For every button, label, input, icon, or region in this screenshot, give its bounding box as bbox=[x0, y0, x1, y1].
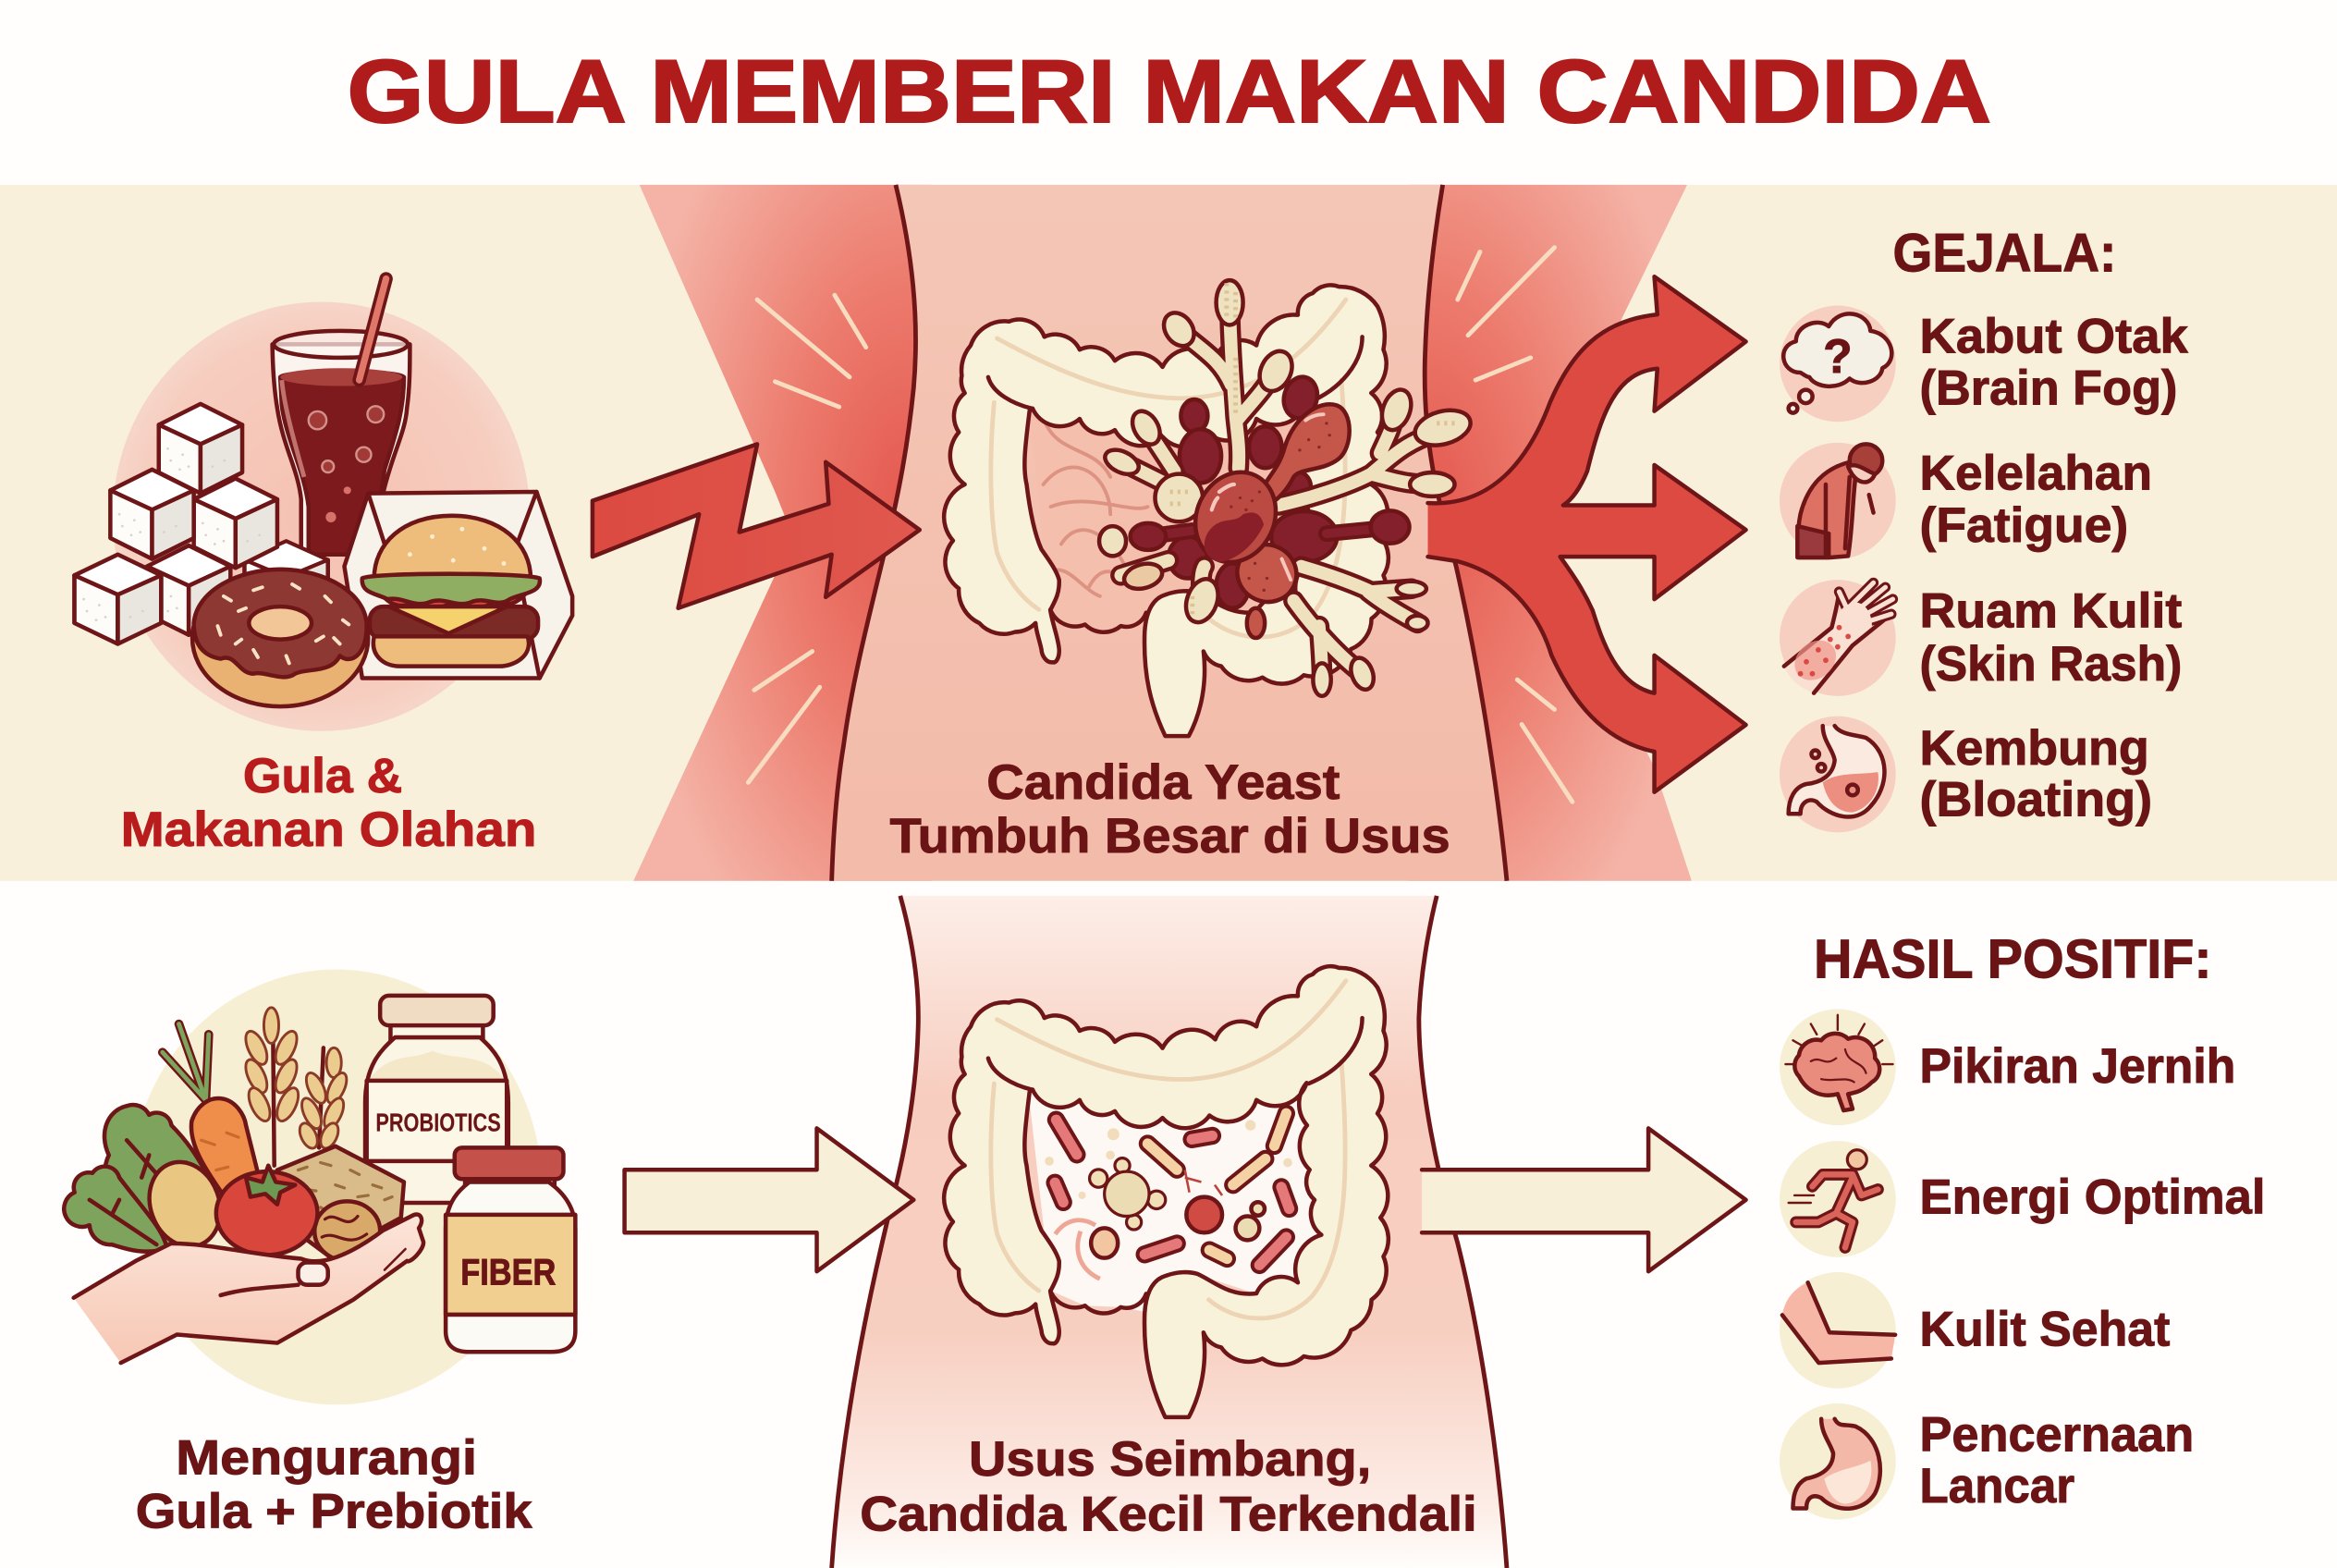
panel: healthy abdomen body bbox=[832, 896, 1507, 1568]
symptom: skin rash: Ruam Kulit bbox=[1920, 584, 2183, 639]
heading: hasil positif: HASIL POSITIF: bbox=[1814, 928, 2212, 990]
hyphae end bulbs bbox=[1099, 280, 1474, 696]
caption: reduce sugar plus prebiotic: Mengurangi bbox=[176, 1430, 477, 1485]
icon: probiotics bottle bbox=[365, 996, 508, 1203]
icon: leafy greens bbox=[64, 1105, 209, 1252]
panel: left flare of inflamed abdomen bbox=[633, 185, 932, 881]
cream rods bbox=[1147, 1113, 1286, 1258]
symptom: fatigue: Kelelahan bbox=[1920, 447, 2152, 501]
top band background bbox=[0, 185, 2337, 881]
icon: fiber bottle bbox=[446, 1147, 575, 1352]
arrow: red zigzag from food into gut bbox=[593, 444, 920, 608]
symptom: fatigue bbox=[1780, 443, 2152, 559]
result: smooth digestion: Pencernaan bbox=[1920, 1407, 2194, 1462]
symptom: brain fog: ? bbox=[1823, 329, 1853, 383]
caption: reduce sugar plus prebiotic bbox=[136, 1430, 532, 1538]
food cluster: sugar, soda, donut, burger bbox=[74, 278, 572, 731]
icon: tomato bbox=[216, 1166, 317, 1255]
icon: chocolate donut bbox=[192, 570, 368, 706]
arrow: red fan to symptoms bbox=[1428, 276, 1746, 792]
decorative inflammation rays bbox=[748, 248, 1572, 802]
caption: reduce sugar plus prebiotic: Gula + Prebiotik bbox=[136, 1484, 532, 1538]
icon: probiotics bottle: PROBIOTICS bbox=[375, 1109, 501, 1137]
balanced colon bbox=[944, 966, 1389, 1417]
red rods bbox=[1055, 1120, 1290, 1265]
panel: inflamed abdomen body bbox=[832, 185, 1507, 881]
dots bbox=[1045, 1121, 1292, 1199]
panel: positive results bbox=[1780, 928, 2266, 1520]
result: healthy skin: Kulit Sehat bbox=[1920, 1302, 2171, 1356]
caption: sugar and processed food: Gula & bbox=[243, 749, 402, 803]
caption: sugar and processed food: Makanan Olahan bbox=[121, 802, 536, 857]
result: clear mind: Pikiran Jernih bbox=[1920, 1039, 2235, 1094]
result: healthy skin bbox=[1780, 1272, 2171, 1389]
panel: gejala symptoms bbox=[1780, 223, 2188, 832]
colon with candida overgrowth bbox=[944, 280, 1474, 736]
symptom: brain fog: Kabut Otak bbox=[1920, 310, 2188, 364]
gut window background bbox=[1028, 1091, 1320, 1312]
icon: soda glass bbox=[273, 278, 410, 555]
title: GULA MEMBERI MAKAN CANDIDA bbox=[348, 42, 1991, 141]
icon: burger in box bbox=[344, 492, 572, 679]
caption: candida overgrowth bbox=[890, 755, 1450, 864]
main candida cell bbox=[1181, 459, 1291, 575]
arrow: cream arrow to results bbox=[1422, 1128, 1746, 1271]
small candida bbox=[1090, 1158, 1265, 1258]
caption: sugar and processed food bbox=[121, 749, 536, 857]
pink circle behind food bbox=[113, 301, 530, 731]
caption: balanced gut: Candida Kecil Terkendali bbox=[860, 1488, 1477, 1542]
result: optimal energy bbox=[1780, 1141, 2266, 1257]
icon: sugar cubes bbox=[74, 404, 328, 643]
heading: gejala: GEJALA: bbox=[1893, 223, 2116, 283]
caption: candida overgrowth: Candida Yeast bbox=[986, 755, 1340, 810]
result: optimal energy: Energi Optimal bbox=[1920, 1170, 2266, 1224]
caption: balanced gut bbox=[860, 1432, 1477, 1542]
lighter red yeast cells bbox=[1228, 404, 1350, 638]
symptom: skin rash bbox=[1780, 580, 2183, 696]
colon outline bbox=[944, 966, 1389, 1417]
icon: walnut bbox=[314, 1201, 380, 1261]
cream circle behind healthy food bbox=[130, 970, 542, 1404]
colon outline bbox=[944, 285, 1389, 736]
icon: grain pile bbox=[277, 1146, 404, 1256]
symptom: fatigue: (Fatigue) bbox=[1920, 498, 2128, 553]
result: smooth digestion bbox=[1780, 1403, 2194, 1520]
symptom: bloating: Kembung bbox=[1920, 721, 2149, 776]
icon: carrot bbox=[163, 1024, 261, 1200]
symptom: brain fog: (Brain Fog) bbox=[1920, 361, 2177, 416]
icon: open hand bbox=[74, 1215, 423, 1363]
dark yeast buds bbox=[1131, 374, 1410, 608]
healthy food cluster: vegetables, wheat, supplements bbox=[64, 970, 575, 1404]
candida colony bbox=[1099, 280, 1474, 696]
caption: candida overgrowth: Tumbuh Besar di Usus bbox=[890, 809, 1450, 864]
symptom: bloating: (Bloating) bbox=[1920, 773, 2152, 827]
icon: potato bbox=[138, 1152, 232, 1256]
arrow: cream arrow into healthy gut bbox=[625, 1128, 913, 1271]
symptom: skin rash: (Skin Rash) bbox=[1920, 637, 2182, 692]
icon: wheat stalks bbox=[241, 1008, 350, 1166]
red blood-like cell bbox=[1186, 1197, 1222, 1232]
panel: right flare of inflamed abdomen bbox=[1409, 185, 1692, 881]
balanced microbiome bbox=[1045, 1113, 1292, 1279]
symptom: bloating bbox=[1780, 717, 2152, 832]
cream hyphae bbox=[1120, 305, 1438, 679]
result: smooth digestion: Lancar bbox=[1920, 1459, 2074, 1513]
result: clear mind bbox=[1780, 1009, 2235, 1125]
inflamed gut interior bbox=[1028, 410, 1320, 631]
symptom: brain fog bbox=[1780, 305, 2188, 422]
caption: balanced gut: Usus Seimbang, bbox=[969, 1432, 1371, 1487]
rod-shaped bacteria outlines bbox=[1055, 1113, 1290, 1265]
icon: fiber bottle: FIBER bbox=[460, 1252, 556, 1293]
